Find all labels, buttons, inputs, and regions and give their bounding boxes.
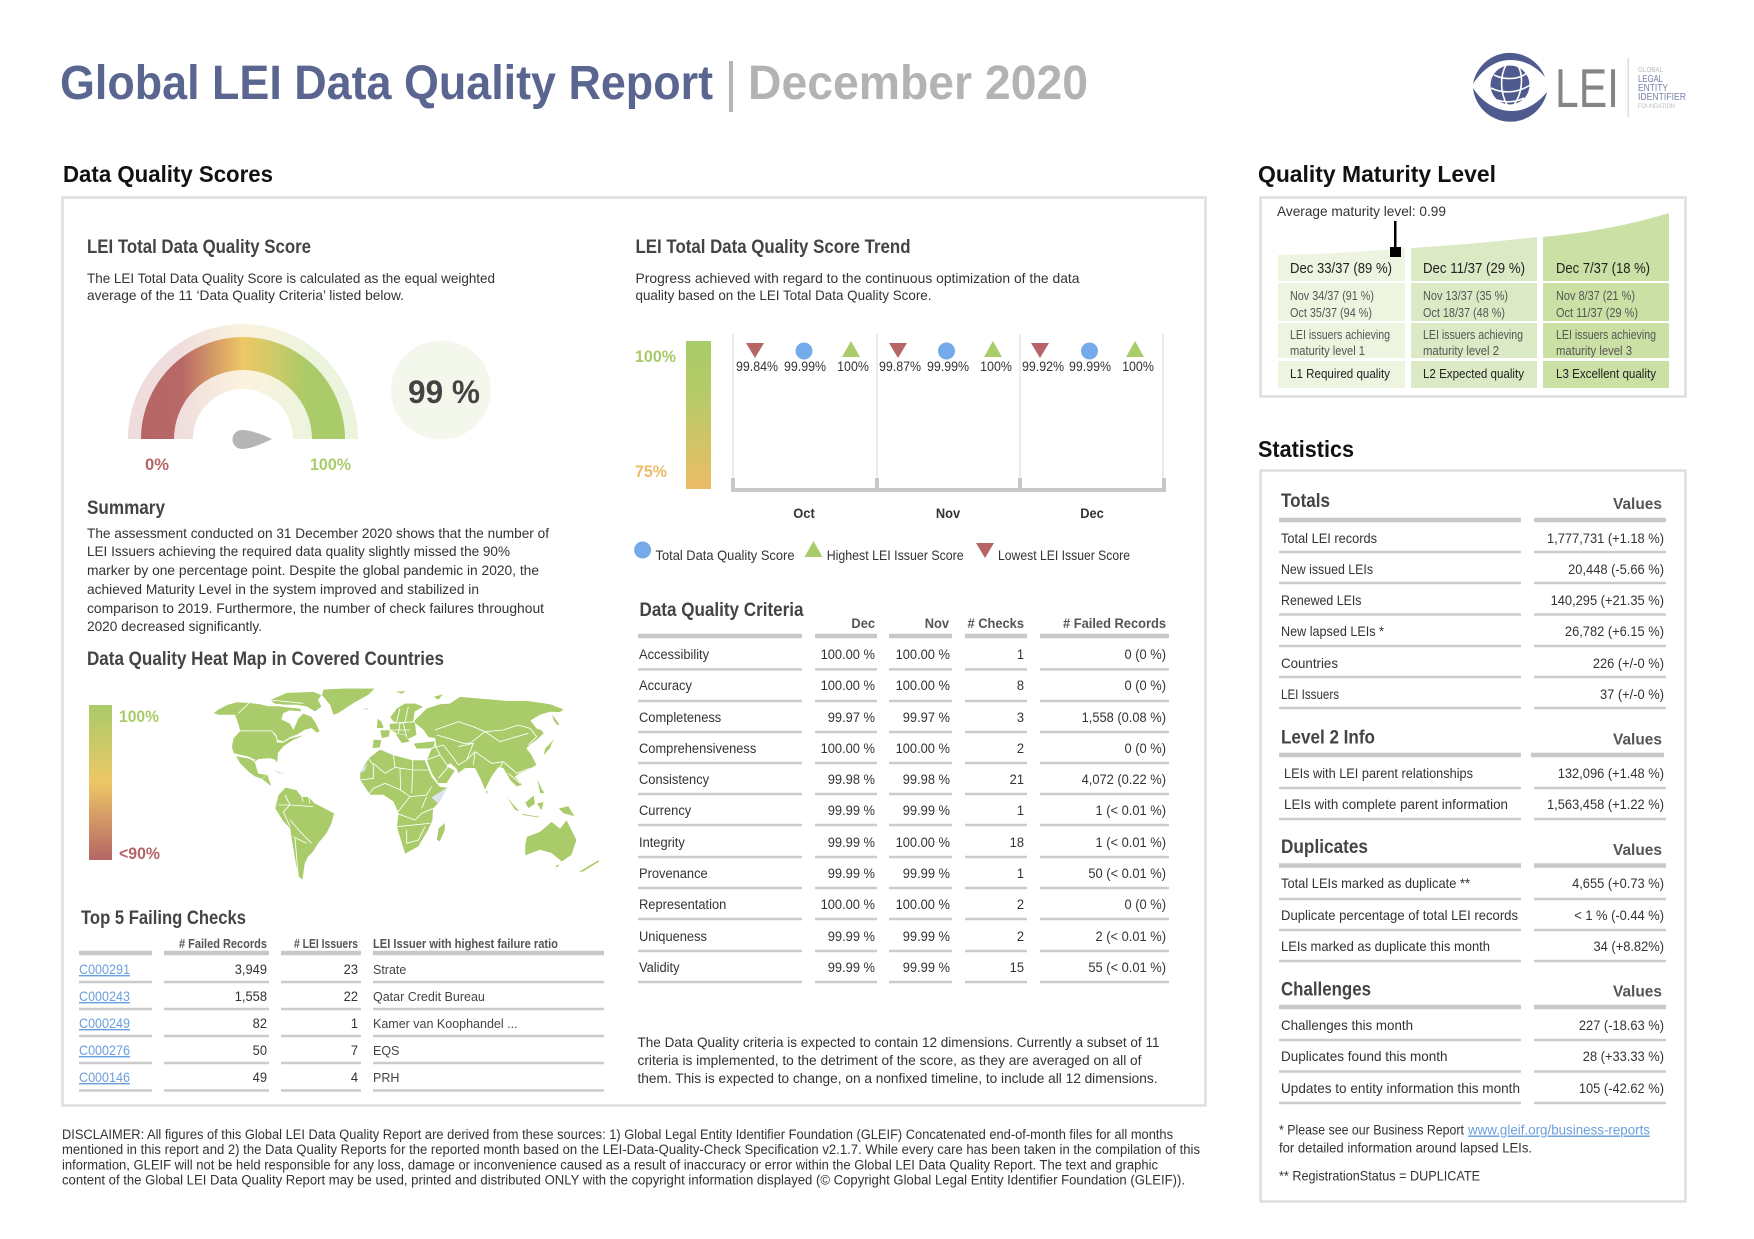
- series: December: 100%: [1122, 359, 1154, 374]
- row: Currency: [639, 803, 1166, 818]
- table: Top 5 Failing Checks: [79, 936, 604, 1090]
- row: Uniqueness: 2 (< 0.01 %): [1096, 929, 1166, 944]
- trend colour scale: 100%: [635, 347, 676, 366]
- row: Consistency: Consistency: [639, 772, 709, 787]
- row: C000291: 3,949: [235, 962, 267, 977]
- row: C000276: C000276: [79, 1042, 130, 1058]
- row: C000291: 23: [344, 962, 358, 977]
- row: Currency: 99.99 %: [828, 803, 875, 818]
- row: Comprehensiveness: 100.00 %: [896, 741, 950, 756]
- row: C000291: C000291: [79, 961, 130, 977]
- text: disclaimer: information, GLEIF will not be held responsible for any loss, damage or inconvenience caused as a result of inaccuracy or error within the Global LEI Data Quality Report. The text and graphic: [62, 1158, 1158, 1172]
- column: L3 Excellent quality: LEI issuers achieving: [1556, 328, 1656, 342]
- footnotes: * Please see our Business Report: [1279, 1122, 1464, 1138]
- row: Integrity: 99.99 %: [828, 835, 875, 850]
- criteria header: Nov: [925, 616, 950, 631]
- row: Completeness: 99.97 %: [903, 710, 950, 725]
- table header: [79, 936, 604, 953]
- row: Provenance: [639, 866, 1166, 881]
- text: summary: achieved Maturity Level in the system improved and stabilized in: [87, 581, 479, 597]
- column: L1 Required quality: L1 Required quality: [1290, 366, 1390, 381]
- row: C000249: [79, 1015, 518, 1031]
- table header: LEI Issuer with highest failure ratio: [373, 936, 558, 951]
- column: L2 Expected quality: LEI issuers achieving: [1423, 328, 1523, 342]
- row: Validity: 15: [1010, 960, 1024, 975]
- gauge chart: 0%: [145, 455, 169, 474]
- text: disclaimer: content of the Global LEI Data Quality Report may be used, printed and distributed ONLY with the copyright information displayed (© Copyright Global Legal Entity Identifier Foundation (GLEIF)).: [62, 1172, 1185, 1188]
- section: Challenges: 28 (+33.33 %): [1583, 1049, 1664, 1064]
- footnotes: for detailed information around lapsed LEIs.: [1279, 1140, 1532, 1156]
- row: C000249: Kamer van Koophandel ...: [373, 1017, 518, 1031]
- title: Global LEI Data Quality Report: [60, 57, 713, 110]
- row: Provenance: 1: [1017, 866, 1024, 881]
- section: Totals: LEI Issuers: [1281, 686, 1339, 702]
- row: Provenance: 99.99 %: [828, 866, 875, 881]
- row: Validity: 99.99 %: [828, 960, 875, 975]
- title: December 2020: [748, 57, 1088, 110]
- row: C000276: 7: [351, 1043, 358, 1058]
- series: October: 100%: [837, 359, 869, 374]
- row: Currency: 1 (< 0.01 %): [1096, 803, 1166, 818]
- section: Level 2 Info: Level 2 Info: [1281, 728, 1375, 748]
- logo: LEI: FOUNDATION: [1638, 103, 1675, 110]
- row: C000243: [79, 988, 485, 1004]
- section: Totals: Totals: [1281, 491, 1330, 512]
- row: C000243: Qatar Credit Bureau: [373, 990, 485, 1004]
- logo: LEI: IDENTIFIER: [1638, 91, 1686, 103]
- row: Completeness: 99.97 %: [828, 710, 875, 725]
- column: L1 Required quality: maturity level 1: [1290, 344, 1365, 358]
- row: Comprehensiveness: 0 (0 %): [1125, 741, 1166, 756]
- series: November: 99.99%: [927, 359, 970, 374]
- row: Completeness: 1,558 (0.08 %): [1082, 710, 1166, 725]
- row: Comprehensiveness: [639, 741, 1166, 756]
- trend colour scale: [635, 341, 711, 489]
- text: criteria note: them. This is expected to change, on a nonfixed timeline, to include all 12 dimensions.: [638, 1070, 1158, 1086]
- subheading: LEI Total Data Quality Score: LEI Total Data Quality Score: [87, 237, 311, 258]
- trend legend: Highest LEI Issuer Score: [827, 547, 964, 563]
- row: Integrity: Integrity: [639, 835, 685, 850]
- row: Integrity: 18: [1010, 835, 1024, 850]
- row: C000291: Strate: [373, 963, 406, 977]
- section: Challenges: Duplicates found this month: [1281, 1048, 1448, 1064]
- series: October: 99.99%: [784, 359, 827, 374]
- row: Consistency: 4,072 (0.22 %): [1082, 772, 1166, 787]
- row: C000243: C000243: [79, 988, 130, 1004]
- subheading: Summary: Summary: [87, 498, 165, 519]
- row: C000276: [79, 1042, 399, 1058]
- section: Level 2 Info: Values: [1613, 732, 1662, 748]
- footnotes: [1279, 1122, 1650, 1184]
- subheading: Top 5 Failing Checks: Top 5 Failing Checks: [81, 908, 246, 929]
- row: Uniqueness: 99.99 %: [828, 929, 875, 944]
- marker: average maturity: [1390, 221, 1401, 257]
- series: October: [736, 341, 869, 374]
- section: Totals: New lapsed LEIs *: [1281, 623, 1384, 639]
- section: Totals: Total LEI records: [1281, 530, 1377, 546]
- row: Completeness: 3: [1017, 710, 1024, 725]
- footnotes: ** RegistrationStatus = DUPLICATE: [1279, 1168, 1480, 1184]
- section: Duplicates: Total LEIs marked as duplicate **: [1281, 875, 1470, 891]
- row: Validity: 99.99 %: [903, 960, 950, 975]
- column: L3 Excellent quality: maturity level 3: [1556, 344, 1632, 358]
- text: trend description: [636, 270, 1080, 303]
- trend chart: [635, 334, 1164, 521]
- month axis labels: Nov: [936, 506, 961, 521]
- row: Integrity: 1 (< 0.01 %): [1096, 835, 1166, 850]
- series: December: 99.92%: [1022, 359, 1065, 374]
- text: criteria note: The Data Quality criteria is expected to contain 12 dimensions. Currently a subset of 11: [638, 1034, 1160, 1050]
- row: Accessibility: Accessibility: [639, 647, 709, 662]
- average maturity label: Average maturity level: 0.99: [1277, 203, 1446, 219]
- section: Totals: Renewed LEIs: [1281, 592, 1362, 608]
- section: Challenges: Updates to entity information this month: [1281, 1080, 1520, 1096]
- row: Accuracy: Accuracy: [639, 678, 692, 693]
- month axis labels: Oct: [793, 506, 815, 521]
- section: Challenges: Challenges: [1281, 980, 1371, 1000]
- row: Accessibility: 0 (0 %): [1125, 647, 1166, 662]
- series: December: [1022, 341, 1154, 374]
- logo: LEI: GLOBAL: [1638, 65, 1663, 74]
- logo: LEI: LEI: [1555, 57, 1619, 119]
- text: score description: average of the 11 ‘Data Quality Criteria’ listed below.: [87, 287, 404, 303]
- column: L1 Required quality: Nov 34/37 (91 %): [1290, 289, 1374, 303]
- text: summary: LEI Issuers achieving the required data quality slightly missed the 90%: [87, 543, 510, 559]
- criteria header: # Checks: [967, 616, 1024, 631]
- logo: LEI: LEGAL: [1638, 73, 1663, 85]
- column: L3 Excellent quality: Dec 7/37 (18 %): [1556, 261, 1650, 277]
- section: Duplicates: 4,655 (+0.73 %): [1572, 876, 1664, 891]
- trend legend: Total Data Quality Score: [656, 547, 795, 563]
- column: L1 Required quality: [1278, 248, 1405, 388]
- section: Duplicates: LEIs marked as duplicate this month: [1281, 938, 1490, 954]
- text: criteria note: criteria is implemented, to the detriment of the score, as they are averaged on all of: [638, 1052, 1142, 1068]
- row: C000146: [79, 1069, 399, 1085]
- row: Currency: Currency: [639, 803, 691, 818]
- text: disclaimer: DISCLAIMER: All figures of this Global LEI Data Quality Report are derived from these sources: 1) Global Legal Entity Identifier Foundation (GLEIF) Concatenated end-of-month files for all months: [62, 1127, 1173, 1142]
- column: L1 Required quality: LEI issuers achieving: [1290, 328, 1390, 342]
- logo: LEI: ENTITY: [1638, 82, 1668, 94]
- column: L1 Required quality: Oct 35/37 (94 %): [1290, 306, 1372, 320]
- row: C000146: 4: [351, 1070, 359, 1085]
- column: L3 Excellent quality: L3 Excellent quality: [1556, 366, 1656, 381]
- row: Comprehensiveness: 2: [1017, 741, 1024, 756]
- row: Comprehensiveness: 100.00 %: [821, 741, 875, 756]
- text: summary: The assessment conducted on 31 December 2020 shows that the number of: [87, 525, 549, 541]
- panel: Statistics: [1260, 470, 1686, 1202]
- column: L2 Expected quality: L2 Expected quality: [1423, 366, 1524, 381]
- row: Accessibility: 100.00 %: [821, 647, 875, 662]
- row: Provenance: 50 (< 0.01 %): [1088, 866, 1166, 881]
- section: Totals: 37 (+/-0 %): [1600, 687, 1664, 702]
- section: Totals: Values: [1613, 496, 1662, 513]
- table header: # LEI Issuers: [294, 936, 358, 951]
- subheading: Data Quality Criteria: Data Quality Criteria: [640, 600, 804, 621]
- section: Level 2 Info: LEIs with LEI parent relationships: [1284, 765, 1473, 781]
- row: C000243: 22: [344, 989, 358, 1004]
- series: October: 99.84%: [736, 359, 779, 374]
- row: Uniqueness: Uniqueness: [639, 929, 707, 944]
- table: Data Quality Criteria: [638, 616, 1169, 982]
- row: Accuracy: 100.00 %: [821, 678, 875, 693]
- section: Totals: [1279, 491, 1666, 708]
- gauge chart: [128, 324, 358, 474]
- row: Representation: Representation: [639, 897, 726, 912]
- trend legend: Lowest LEI Issuer Score: [998, 547, 1130, 563]
- row: C000291: [79, 961, 406, 977]
- row: C000276: 50: [253, 1043, 267, 1058]
- row: Validity: Validity: [639, 960, 680, 975]
- column: L3 Excellent quality: Nov 8/37 (21 %): [1556, 289, 1635, 303]
- section: Duplicates: Values: [1613, 842, 1662, 859]
- text: summary: 2020 decreased significantly.: [87, 618, 262, 634]
- row: Accessibility: 100.00 %: [896, 647, 950, 662]
- subheading: heat map: Data Quality Heat Map in Covered Countries: [87, 649, 444, 670]
- row: Consistency: [639, 772, 1166, 787]
- text: score description: The LEI Total Data Quality Score is calculated as the equal weighted: [87, 270, 495, 286]
- section: Totals: 140,295 (+21.35 %): [1551, 593, 1664, 608]
- section: Duplicates: [1279, 837, 1666, 961]
- row: Consistency: 99.98 %: [903, 772, 950, 787]
- section: Totals: Countries: [1281, 655, 1338, 671]
- row: Uniqueness: [639, 929, 1166, 944]
- row: Representation: 100.00 %: [821, 897, 875, 912]
- gauge chart: 100%: [310, 455, 351, 474]
- trend legend: [634, 541, 1130, 563]
- subheading: Trend: LEI Total Data Quality Score Trend: [636, 237, 910, 258]
- row: Integrity: 100.00 %: [896, 835, 950, 850]
- row: Validity: [639, 960, 1166, 975]
- section: Challenges: 227 (-18.63 %): [1579, 1018, 1664, 1033]
- section: Duplicates: Duplicate percentage of total LEI records: [1281, 907, 1518, 923]
- row: Accessibility: 1: [1017, 647, 1024, 662]
- text: summary: comparison to 2019. Furthermore, the number of check failures throughout: [87, 600, 544, 616]
- row: Provenance: 99.99 %: [903, 866, 950, 881]
- row: Currency: 1: [1017, 803, 1024, 818]
- text: criteria note: [638, 1034, 1160, 1086]
- text: trend description: Progress achieved with regard to the continuous optimization of the data: [636, 270, 1080, 286]
- row: Accessibility: [639, 647, 1166, 662]
- row: Representation: [639, 897, 1166, 912]
- row: Representation: 2: [1017, 897, 1024, 912]
- section: Totals: 1,777,731 (+1.18 %): [1547, 531, 1664, 546]
- row: C000276: EQS: [373, 1044, 399, 1058]
- column: L2 Expected quality: [1411, 237, 1537, 388]
- row: Provenance: Provenance: [639, 866, 708, 881]
- row: Consistency: 21: [1010, 772, 1024, 787]
- row: Representation: 0 (0 %): [1125, 897, 1166, 912]
- section: Totals: 20,448 (-5.66 %): [1568, 562, 1664, 577]
- logo: LEI: [1473, 53, 1686, 122]
- score badge: 99 %: 99 %: [408, 374, 480, 410]
- title: [60, 57, 1088, 112]
- row: C000146: PRH: [373, 1071, 399, 1085]
- row: Comprehensiveness: Comprehensiveness: [639, 741, 757, 756]
- row: C000249: 82: [253, 1016, 267, 1031]
- row: Representation: 100.00 %: [896, 897, 950, 912]
- column: L2 Expected quality: Oct 18/37 (48 %): [1423, 306, 1505, 320]
- row: C000146: 49: [253, 1070, 267, 1085]
- panel: Data Quality Scores: [62, 198, 1206, 1106]
- section: Challenges: Values: [1613, 984, 1662, 1000]
- section: Challenges: [1279, 980, 1666, 1103]
- heading: Data Quality Scores: Data Quality Scores: [63, 161, 273, 187]
- row: Uniqueness: 2: [1017, 929, 1024, 944]
- text: summary: [87, 525, 549, 634]
- row: Accuracy: 0 (0 %): [1125, 678, 1166, 693]
- trend colour scale: 75%: [635, 462, 667, 481]
- row: Accuracy: 100.00 %: [896, 678, 950, 693]
- text: summary: marker by one percentage point. Despite the global pandemic in 2020, the: [87, 562, 539, 578]
- section: Duplicates: 34 (+8.82%): [1594, 939, 1664, 954]
- footnotes: www.gleif.org/business-reports: [1467, 1122, 1650, 1138]
- column: L2 Expected quality: Nov 13/37 (35 %): [1423, 289, 1508, 303]
- world map: [213, 688, 599, 880]
- section: Challenges: 105 (-42.62 %): [1579, 1081, 1664, 1096]
- row: Currency: 99.99 %: [903, 803, 950, 818]
- text: score description: [87, 270, 495, 303]
- section: Duplicates: < 1 % (-0.44 %): [1574, 908, 1664, 923]
- series: November: 99.87%: [879, 359, 922, 374]
- criteria header: [638, 616, 1169, 636]
- row: C000249: C000249: [79, 1015, 130, 1031]
- row: Completeness: Completeness: [639, 710, 722, 725]
- section: Totals: New issued LEIs: [1281, 561, 1373, 577]
- series: November: [879, 341, 1012, 374]
- panel: Quality Maturity Level: [1260, 198, 1686, 396]
- text: trend description: quality based on the LEI Total Data Quality Score.: [636, 287, 932, 303]
- heading: Quality Maturity Level: Quality Maturity Level: [1258, 161, 1496, 187]
- column: L3 Excellent quality: [1543, 213, 1669, 388]
- row: Accuracy: [639, 678, 1166, 693]
- row: Validity: 55 (< 0.01 %): [1088, 960, 1166, 975]
- month axis labels: Dec: [1080, 506, 1104, 521]
- section: Duplicates: Duplicates: [1281, 837, 1368, 858]
- heat map legend: [89, 705, 160, 863]
- heat map legend: <90%: [119, 844, 160, 863]
- criteria header: Dec: [851, 616, 876, 631]
- section: Totals: 26,782 (+6.15 %): [1565, 624, 1664, 639]
- row: Accuracy: 8: [1017, 678, 1024, 693]
- series: November: 100%: [980, 359, 1012, 374]
- row: Consistency: 99.98 %: [828, 772, 875, 787]
- section: Level 2 Info: 1,563,458 (+1.22 %): [1547, 797, 1664, 812]
- row: Uniqueness: 99.99 %: [903, 929, 950, 944]
- criteria header: # Failed Records: [1063, 616, 1166, 631]
- column: L3 Excellent quality: Oct 11/37 (29 %): [1556, 306, 1638, 320]
- row: Completeness: [639, 710, 1166, 725]
- text: disclaimer: mentioned in this report and 2) the Data Quality Reports for the reported month based on the LEI-Data-Quality-Check Specification v2.1.7. While every care has been taken in the compilation of this: [62, 1142, 1200, 1157]
- heading: Statistics: Statistics: [1258, 436, 1354, 462]
- row: Integrity: [639, 835, 1166, 850]
- section: Level 2 Info: LEIs with complete parent information: [1284, 796, 1508, 812]
- section: Challenges: Challenges this month: [1281, 1017, 1413, 1033]
- row: C000243: 1,558: [235, 989, 267, 1004]
- month axis labels: [793, 506, 1104, 521]
- series: December: 99.99%: [1069, 359, 1112, 374]
- heat map legend: 100%: [119, 707, 159, 726]
- column: L2 Expected quality: maturity level 2: [1423, 344, 1499, 358]
- column: L2 Expected quality: Dec 11/37 (29 %): [1423, 261, 1525, 277]
- section: Totals: 226 (+/-0 %): [1593, 656, 1664, 671]
- row: C000249: 1: [351, 1016, 358, 1031]
- table header: # Failed Records: [179, 936, 267, 951]
- score badge: 99 %: [391, 340, 491, 440]
- section: Level 2 Info: 132,096 (+1.48 %): [1558, 766, 1664, 781]
- text: disclaimer: [62, 1127, 1200, 1188]
- row: C000146: C000146: [79, 1069, 130, 1085]
- section: Level 2 Info: [1279, 728, 1666, 819]
- column: L1 Required quality: Dec 33/37 (89 %): [1290, 261, 1392, 277]
